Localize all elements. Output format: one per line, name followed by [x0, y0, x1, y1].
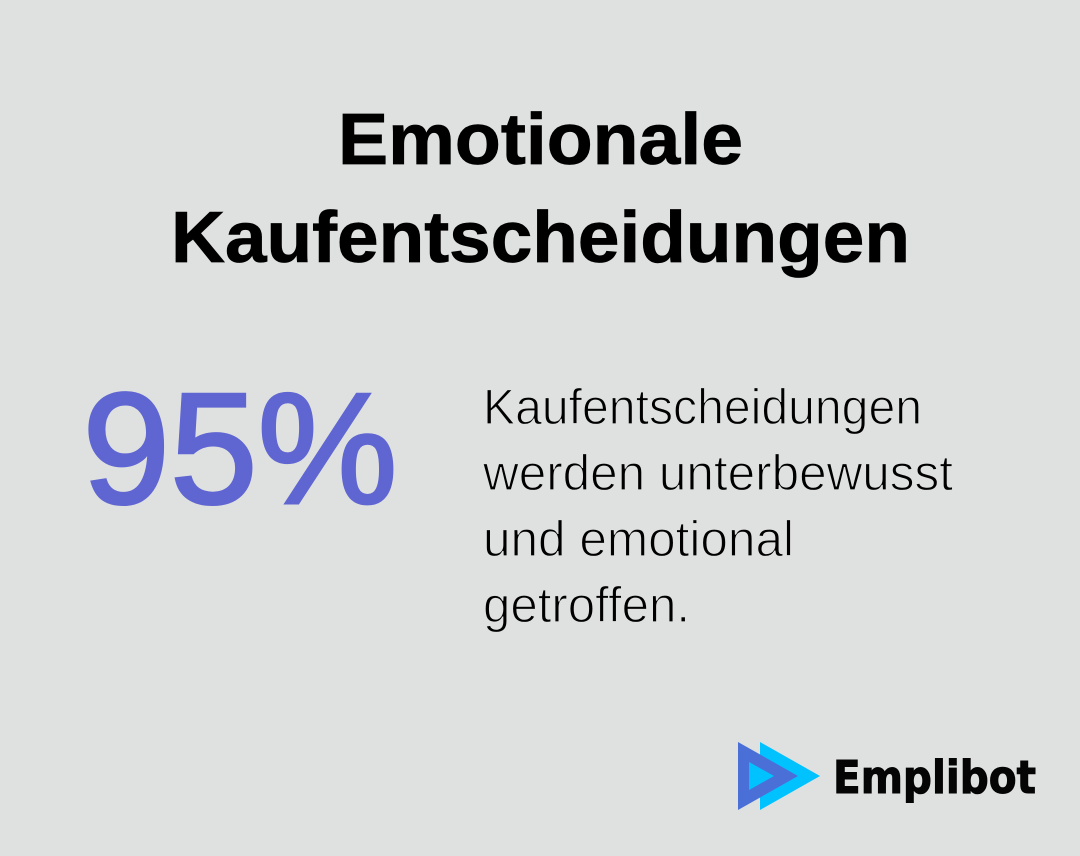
description text: getroffen. — [483, 577, 690, 633]
icon: play triangles — [738, 742, 820, 810]
logo: Emplibot — [738, 742, 1036, 810]
statistic: 95%: 95% — [82, 361, 398, 537]
description text: und emotional — [483, 511, 794, 567]
title: Kaufentscheidungen — [171, 198, 910, 278]
title — [171, 100, 910, 278]
title: Emotionale — [338, 100, 743, 180]
description text: Kaufentscheidungen — [483, 379, 922, 435]
description text — [482, 379, 953, 633]
logo wordmark: Emplibot — [833, 751, 1036, 804]
description text: werden unterbewusst — [482, 445, 953, 501]
